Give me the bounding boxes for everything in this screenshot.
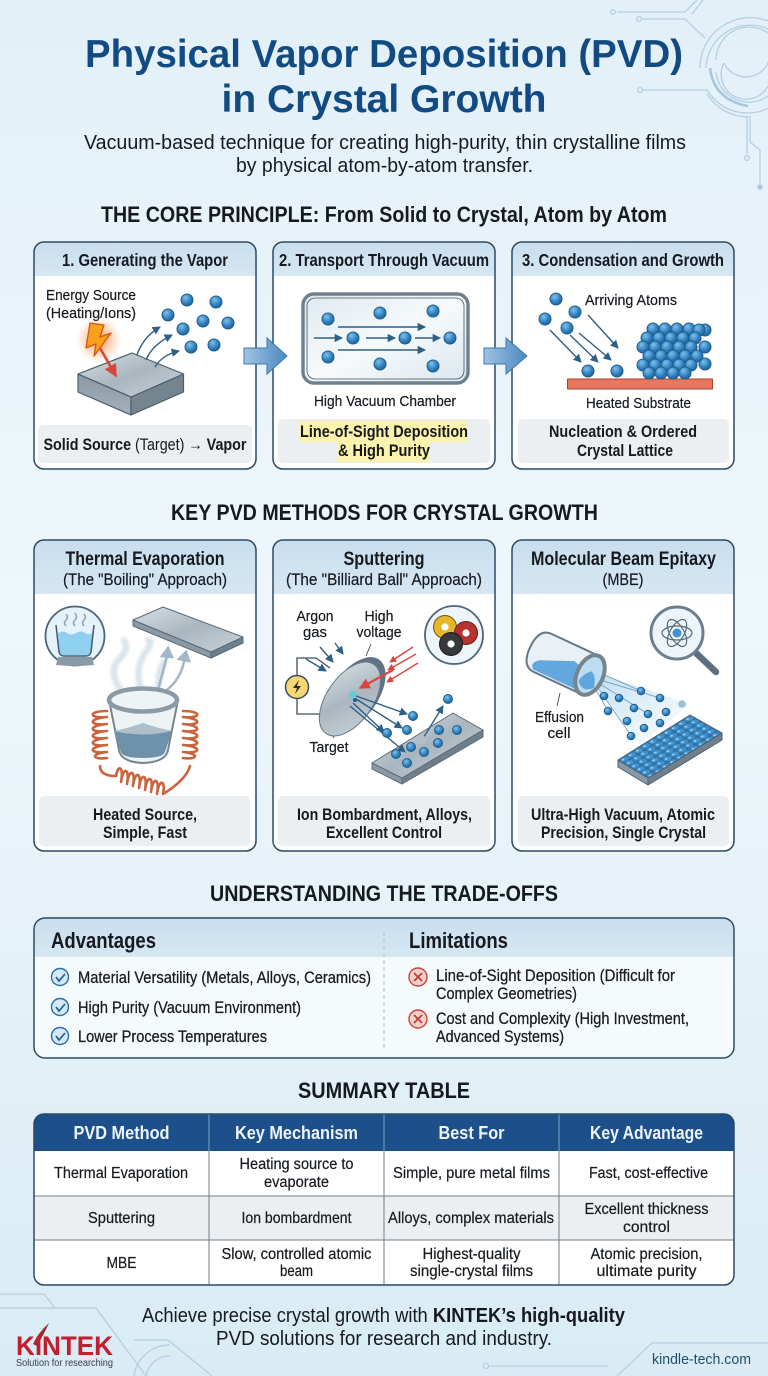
icon: crystal lattice bbox=[637, 323, 711, 379]
advantage: high purity: High Purity (Vacuum Environment) bbox=[78, 999, 301, 1017]
table row: sputtering: Alloys, complex materials bbox=[388, 1210, 554, 1227]
advantage: lower temperatures: Lower Process Temperatures bbox=[78, 1028, 267, 1046]
table row: mbe: Atomic precision, bbox=[590, 1246, 702, 1263]
table row: sputtering: Excellent thickness bbox=[584, 1201, 709, 1218]
label: effusion cell: Effusion bbox=[535, 709, 584, 726]
icon: crucible bbox=[109, 688, 178, 763]
footer text bbox=[531, 805, 715, 842]
table row: thermal evaporation: evaporate bbox=[264, 1174, 329, 1191]
table row: thermal evaporation: Fast, cost-effective bbox=[589, 1165, 708, 1182]
footer box bbox=[278, 796, 490, 846]
closing statement: Achieve precise crystal growth with KINTEK’s high-quality bbox=[142, 1305, 626, 1327]
logo: KINTEK: KINTEK bbox=[16, 1331, 113, 1361]
panel subheading: (The "Billiard Ball" Approach) bbox=[286, 570, 482, 589]
title: Physical Vapor Deposition (PVD) bbox=[85, 33, 683, 76]
label: arriving atoms: Arriving Atoms bbox=[585, 292, 677, 309]
panel heading: 3. Condensation and Growth bbox=[522, 250, 724, 270]
label: energy source bbox=[46, 287, 136, 322]
icon: boiling beaker bbox=[46, 606, 104, 666]
footer box bbox=[518, 796, 729, 846]
panel: sputtering bbox=[273, 540, 495, 851]
icon: heating coil bbox=[93, 711, 197, 794]
footer text: Ultra-High Vacuum, Atomic bbox=[531, 805, 715, 824]
table header: PVD Method bbox=[74, 1123, 170, 1143]
table row: sputtering: control bbox=[623, 1219, 670, 1236]
icon: transported atoms bbox=[322, 305, 456, 372]
icon: rising arrows bbox=[158, 648, 189, 692]
label: heated substrate: Heated Substrate bbox=[586, 395, 691, 412]
table row: sputtering bbox=[88, 1201, 709, 1236]
website: kindle-tech.com bbox=[652, 1351, 751, 1368]
footer text: Excellent Control bbox=[326, 823, 442, 842]
icon: steam bbox=[114, 640, 164, 692]
table row: sputtering: Ion bombardment bbox=[242, 1210, 352, 1227]
table row: mbe: beam bbox=[280, 1263, 313, 1280]
panel heading: Thermal Evaporation bbox=[66, 549, 224, 570]
circuit decoration: bottom bbox=[0, 1294, 768, 1376]
icon: heated substrate bbox=[568, 379, 712, 389]
heading: advantages: Advantages bbox=[51, 928, 156, 953]
limitation: line of sight: Line-of-Sight Deposition (Difficult for bbox=[436, 967, 675, 985]
table header: Key Mechanism bbox=[235, 1123, 358, 1143]
advantage: material versatility: Material Versatility (Metals, Alloys, Ceramics) bbox=[78, 969, 371, 987]
footer text: Ion Bombardment, Alloys, bbox=[297, 805, 472, 824]
panel: generating the vapor bbox=[34, 242, 256, 469]
closing statement bbox=[142, 1305, 626, 1350]
label: high voltage: High bbox=[364, 608, 394, 625]
table row: mbe bbox=[106, 1246, 702, 1280]
footer text: Precision, Single Crystal bbox=[541, 823, 706, 842]
label: effusion cell: cell bbox=[548, 725, 570, 742]
limitation: line of sight bbox=[409, 967, 675, 1003]
panel subheading: (The "Boiling" Approach) bbox=[63, 570, 227, 589]
panel: condensation and growth bbox=[512, 242, 734, 469]
limitation: line of sight: Complex Geometries) bbox=[436, 985, 577, 1003]
footer text: Solid Source (Target) → Vapor bbox=[44, 435, 247, 454]
table row: thermal evaporation: Thermal Evaporation bbox=[54, 1165, 188, 1182]
limitation: cost bbox=[409, 1010, 689, 1046]
closing statement: PVD solutions for research and industry. bbox=[216, 1328, 552, 1350]
footer text: Crystal Lattice bbox=[577, 441, 673, 460]
table row: mbe: ultimate purity bbox=[596, 1263, 697, 1280]
table row: mbe: Slow, controlled atomic bbox=[222, 1246, 372, 1263]
icon: sputtered atom rays bbox=[350, 696, 443, 752]
arrow: step 1 to 2 bbox=[244, 338, 287, 374]
logo: KINTEK bbox=[16, 1323, 113, 1369]
icon: arriving arrows bbox=[550, 315, 618, 362]
footer text: Line-of-Sight Deposition bbox=[300, 422, 468, 441]
icon: target disc bbox=[307, 646, 398, 747]
table row: sputtering: Sputtering bbox=[88, 1210, 155, 1227]
icon: energy bolt bbox=[76, 317, 122, 376]
icon: vacuum chamber bbox=[303, 294, 468, 383]
footer box bbox=[38, 425, 252, 463]
icon: magnifier with atom bbox=[651, 607, 716, 672]
panel heading: 2. Transport Through Vacuum bbox=[279, 250, 489, 270]
icon: ion arrows bbox=[360, 647, 418, 688]
table row: thermal evaporation: Simple, pure metal films bbox=[393, 1165, 550, 1182]
panel heading: Sputtering bbox=[344, 549, 424, 570]
limitation: cost: Advanced Systems) bbox=[436, 1028, 564, 1046]
table row: thermal evaporation bbox=[54, 1156, 708, 1191]
footer text bbox=[297, 805, 472, 842]
footer text: Heated Source, bbox=[93, 805, 197, 824]
icon: solid source block bbox=[78, 353, 184, 415]
footer text: Nucleation & Ordered bbox=[549, 422, 697, 441]
icon: vapor atoms bbox=[162, 294, 234, 353]
icon: sputtered atoms bbox=[382, 694, 462, 768]
limitation: cost: Cost and Complexity (High Investment, bbox=[436, 1010, 689, 1028]
panel: molecular beam epitaxy bbox=[512, 540, 734, 851]
title: in Crystal Growth bbox=[222, 78, 546, 121]
icon: effusion cell bbox=[521, 628, 611, 700]
table header: Key Advantage bbox=[590, 1123, 703, 1143]
arrow: step 2 to 3 bbox=[484, 338, 527, 374]
label: argon gas: gas bbox=[303, 624, 327, 641]
footer box bbox=[278, 419, 490, 463]
label: energy source: Energy Source bbox=[46, 287, 136, 304]
panel: trade-offs bbox=[34, 918, 734, 1058]
table row: mbe: Highest-quality bbox=[422, 1246, 521, 1263]
icon: deposition plate bbox=[372, 713, 483, 784]
table row: thermal evaporation: Heating source to bbox=[240, 1156, 354, 1173]
table header bbox=[74, 1123, 703, 1143]
label: argon gas: Argon bbox=[296, 608, 334, 625]
icon: arriving atoms bbox=[539, 293, 623, 377]
footer text: & High Purity bbox=[338, 441, 430, 460]
footer text bbox=[300, 422, 468, 460]
heading: summary: SUMMARY TABLE bbox=[298, 1078, 470, 1103]
label: argon gas bbox=[296, 608, 334, 641]
label: high voltage bbox=[356, 608, 402, 641]
panel: transport through vacuum bbox=[273, 242, 495, 469]
footer text: Simple, Fast bbox=[103, 823, 187, 842]
icon: power supply bbox=[286, 658, 330, 714]
subtitle: by physical atom-by-atom transfer. bbox=[236, 155, 533, 177]
icon: rising vapor arrows bbox=[137, 327, 179, 367]
footer text bbox=[93, 805, 197, 842]
highlight bbox=[300, 421, 468, 462]
icon: crystal array plate bbox=[618, 715, 722, 785]
icon: substrate plate bbox=[133, 607, 243, 658]
table row: mbe: MBE bbox=[106, 1255, 136, 1272]
summary table bbox=[34, 1114, 734, 1285]
panel heading: Molecular Beam Epitaxy bbox=[531, 549, 716, 570]
icon: molecular beam bbox=[594, 672, 690, 745]
subtitle: Vacuum-based technique for creating high-purity, thin crystalline films bbox=[84, 132, 686, 154]
heading: core principle: THE CORE PRINCIPLE: From Solid to Crystal, Atom by Atom bbox=[101, 202, 667, 227]
table header: Best For bbox=[438, 1123, 504, 1143]
title bbox=[85, 33, 683, 121]
heading: trade-offs: UNDERSTANDING THE TRADE-OFFS bbox=[210, 881, 558, 906]
footer box bbox=[39, 796, 250, 846]
panel subheading: (MBE) bbox=[602, 570, 644, 589]
label: high voltage: voltage bbox=[356, 624, 402, 641]
icon: argon arrows bbox=[306, 643, 343, 671]
label: effusion cell bbox=[535, 709, 584, 742]
panel: thermal evaporation bbox=[34, 540, 256, 851]
icon: beam atoms bbox=[600, 687, 686, 740]
panel heading: 1. Generating the Vapor bbox=[62, 250, 228, 270]
logo: KINTEK: Solution for researching bbox=[16, 1358, 113, 1369]
icon: billiard balls bbox=[425, 606, 483, 664]
heading: key methods: KEY PVD METHODS FOR CRYSTAL GROWTH bbox=[171, 500, 598, 525]
footer box bbox=[518, 419, 729, 463]
table row: mbe: single-crystal films bbox=[410, 1263, 533, 1280]
label: chamber: High Vacuum Chamber bbox=[314, 393, 456, 410]
circuit decoration: top right bbox=[611, 0, 768, 190]
subtitle bbox=[84, 132, 686, 177]
label: energy source: (Heating/Ions) bbox=[46, 305, 136, 322]
heading: limitations: Limitations bbox=[409, 928, 508, 953]
footer text bbox=[549, 422, 697, 460]
icon: transport arrows bbox=[314, 327, 440, 350]
label: target: Target bbox=[310, 739, 349, 756]
